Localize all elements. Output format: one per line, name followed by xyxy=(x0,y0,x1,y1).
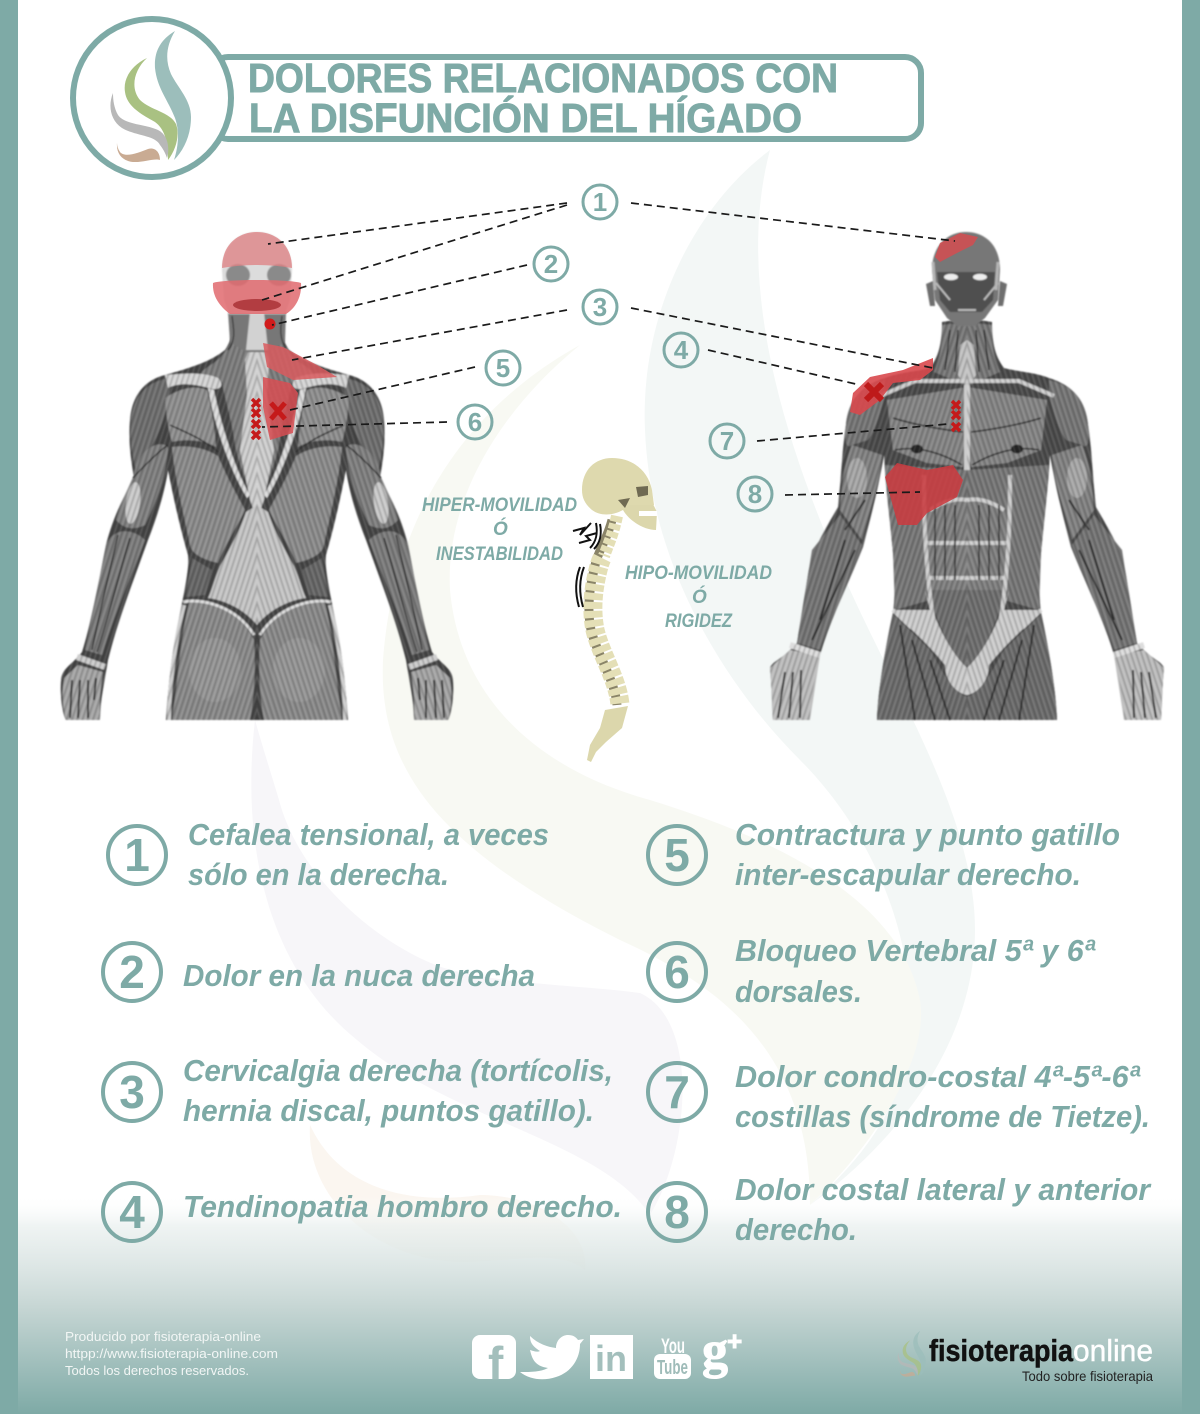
footer brand logo: fisioterapia xyxy=(929,1333,1074,1368)
figure: back muscular body xyxy=(60,232,454,720)
icon: youtube: You xyxy=(661,1335,685,1358)
title box xyxy=(212,57,921,139)
small number markers: 7 xyxy=(720,426,734,456)
dashed leader lines xyxy=(262,203,955,495)
legend item 5 xyxy=(648,817,1120,892)
pain areas front xyxy=(850,233,978,525)
legend item 2: Dolor en la nuca derecha xyxy=(183,958,535,993)
motion marks xyxy=(573,523,601,607)
legend item 7 xyxy=(648,1059,1150,1134)
icon: google plus: + xyxy=(727,1326,742,1356)
small number markers: 1 xyxy=(593,187,607,217)
legend item 8: derecho. xyxy=(735,1212,857,1247)
legend item 8 xyxy=(648,1172,1152,1247)
legend item 7: costillas (síndrome de Tietze). xyxy=(735,1099,1150,1134)
footer credits: httpp://www.fisioterapia-online.com xyxy=(65,1346,278,1361)
legend item 6: 6 xyxy=(664,946,690,998)
legend item 4: 4 xyxy=(119,1186,145,1238)
label: hipo-movilidad: Ó xyxy=(692,586,707,608)
legend item 6: dorsales. xyxy=(735,974,862,1009)
legend item 1 xyxy=(108,817,549,892)
legend item 8: Dolor costal lateral y anterior xyxy=(735,1172,1152,1207)
icon: linkedin: in xyxy=(595,1338,627,1379)
legend item 1: sólo en la derecha. xyxy=(188,857,449,892)
legend item 7: 7 xyxy=(664,1066,690,1118)
skeleton: skull and spine xyxy=(573,458,657,762)
footer gradient band xyxy=(0,1195,1200,1414)
legend item 3: hernia discal, puntos gatillo). xyxy=(183,1093,594,1128)
icon: google plus xyxy=(702,1322,742,1379)
small number markers: 4 xyxy=(674,335,689,365)
label: hiper-movilidad: HIPER-MOVILIDAD xyxy=(422,495,577,516)
legend item 3: Cervicalgia derecha (tortícolis, xyxy=(183,1053,613,1088)
footer brand logo: Todo sobre fisioterapia xyxy=(1022,1368,1153,1384)
legend item 3: 3 xyxy=(119,1066,145,1118)
legend item 2: 2 xyxy=(119,946,145,998)
small number markers: 3 xyxy=(593,292,607,322)
logo badge xyxy=(73,19,231,177)
legend item 4 xyxy=(103,1183,622,1241)
background watermark flames xyxy=(251,150,975,1270)
label: hipo-movilidad: RIGIDEZ xyxy=(665,611,733,632)
pain areas back xyxy=(213,232,337,440)
icon: facebook: f xyxy=(488,1337,504,1389)
title: LA DISFUNCIÓN DEL HÍGADO xyxy=(249,95,802,141)
legend item 6: Bloqueo Vertebral 5ª y 6ª xyxy=(735,933,1096,968)
icon: google plus: g xyxy=(702,1322,728,1379)
legend item 3 xyxy=(103,1053,613,1128)
legend item 2 xyxy=(103,943,535,1001)
small number markers: 5 xyxy=(496,353,510,383)
figure: front muscular body xyxy=(770,232,1164,720)
legend item 5: 5 xyxy=(664,829,690,881)
footer brand logo: online xyxy=(1073,1333,1153,1368)
legend item 5: inter-escapular derecho. xyxy=(735,857,1081,892)
legend item 7: Dolor condro-costal 4ª-5ª-6ª xyxy=(735,1059,1142,1094)
legend item 1: Cefalea tensional, a veces xyxy=(188,817,549,852)
left side border xyxy=(0,0,18,1414)
icon: linkedin xyxy=(590,1335,633,1379)
footer brand logo xyxy=(898,1331,1153,1384)
footer credits: Todos los derechos reservados. xyxy=(65,1363,249,1378)
small number markers xyxy=(458,185,772,511)
back head xyxy=(222,232,292,352)
legend item 4: Tendinopatia hombro derecho. xyxy=(183,1189,622,1224)
front head xyxy=(926,232,1007,326)
right side border xyxy=(1182,0,1200,1414)
icon: youtube: Tube xyxy=(657,1357,688,1379)
legend item 1: 1 xyxy=(124,829,150,881)
legend item 6 xyxy=(648,933,1096,1009)
small number markers: 2 xyxy=(544,249,558,279)
icon: twitter xyxy=(520,1335,584,1379)
label: hiper-movilidad: INESTABILIDAD xyxy=(436,544,563,565)
social icons xyxy=(472,1322,742,1389)
legend item 5: Contractura y punto gatillo xyxy=(735,817,1120,852)
label: hiper-movilidad: Ó xyxy=(493,518,508,540)
legend item 8: 8 xyxy=(664,1186,690,1238)
footer credits: Producido por fisioterapia-online xyxy=(65,1329,261,1344)
label: hipo-movilidad: HIPO-MOVILIDAD xyxy=(625,563,772,584)
small number markers: 6 xyxy=(468,407,482,437)
icon: youtube xyxy=(654,1335,691,1379)
icon: facebook xyxy=(472,1335,516,1389)
small number markers: 8 xyxy=(748,479,762,509)
title: DOLORES RELACIONADOS CON xyxy=(248,55,838,101)
